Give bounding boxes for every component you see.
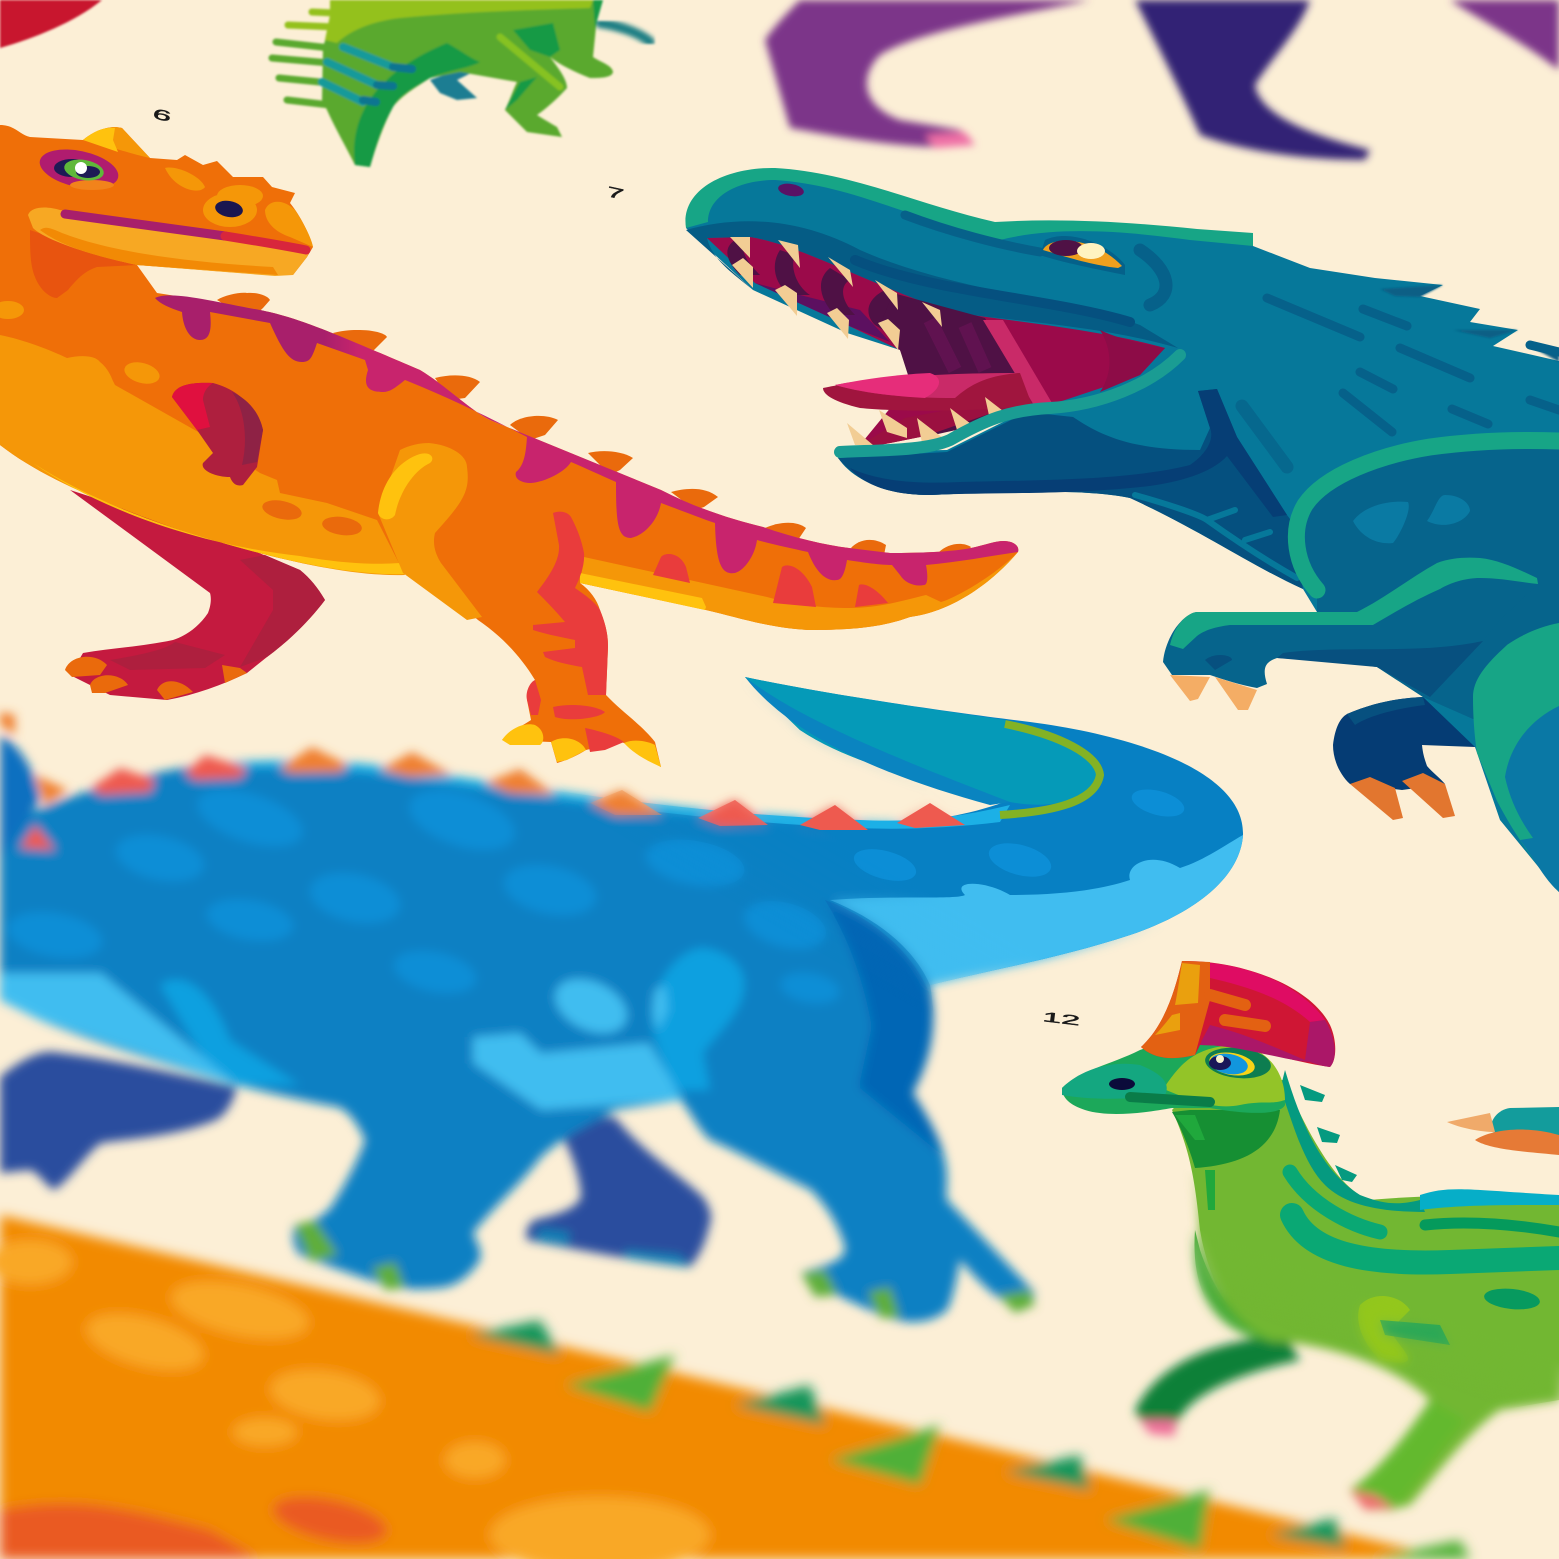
teal dinosaur number 7 xyxy=(685,168,1559,892)
thigh xyxy=(378,443,482,620)
thigh spots xyxy=(1353,495,1470,543)
eye xyxy=(36,143,122,195)
lower lip xyxy=(28,208,310,276)
far leg xyxy=(70,490,325,700)
jaw shadow xyxy=(30,230,137,298)
green dinosaur sharp upper overlay xyxy=(1062,961,1559,1406)
leg red stripe xyxy=(533,512,608,695)
spikes xyxy=(217,293,971,556)
tail red patches xyxy=(653,554,888,607)
teeth xyxy=(730,237,1007,445)
number label 6: 6 xyxy=(151,106,173,125)
top purple dinosaur legs xyxy=(765,0,1559,160)
orange spots xyxy=(0,1240,710,1559)
toes xyxy=(502,724,661,767)
upper jaw dark band xyxy=(686,221,1178,348)
back stripe and drips xyxy=(155,295,1018,586)
neck spine xyxy=(1280,1070,1425,1212)
snout xyxy=(165,167,205,191)
body xyxy=(0,125,1018,767)
back scutes xyxy=(1380,285,1559,362)
near leg xyxy=(1473,623,1559,892)
far back leg xyxy=(526,1117,711,1267)
blue dinosaur sharp upper overlay xyxy=(556,677,1244,1010)
far leg xyxy=(1333,697,1480,790)
far front leg xyxy=(0,1052,237,1190)
arm claws xyxy=(1170,675,1257,710)
neck marks xyxy=(1267,298,1559,432)
feet toes xyxy=(295,1220,1035,1318)
orange foreground dinosaur with green spikes xyxy=(0,1215,1470,1559)
back highlight xyxy=(200,760,1010,829)
spots xyxy=(4,778,1187,1008)
head fragment at left xyxy=(0,735,40,860)
foot claws xyxy=(1350,773,1455,820)
green back spikes xyxy=(470,1320,560,1355)
top green dinosaur xyxy=(272,0,650,167)
body spots xyxy=(122,359,162,387)
thigh xyxy=(1296,441,1559,720)
crest xyxy=(1141,961,1335,1067)
top-left red dinosaur fragment xyxy=(0,0,102,48)
lower jaw and throat xyxy=(838,389,1303,589)
eye xyxy=(1205,1048,1271,1078)
eye xyxy=(1040,236,1125,275)
head xyxy=(1062,1040,1285,1114)
tail stripe xyxy=(1000,724,1100,815)
stripes xyxy=(1290,1172,1380,1232)
orange dinosaur number 6 xyxy=(0,125,1018,767)
back spikes xyxy=(92,747,965,830)
lower red-orange band xyxy=(0,1504,260,1559)
lower jaw rim xyxy=(840,355,1180,452)
green top band xyxy=(685,168,1253,300)
tongue xyxy=(823,373,1032,411)
belly xyxy=(0,335,405,575)
hip shade xyxy=(825,900,943,1153)
number label 7: 7 xyxy=(605,184,625,203)
number label 12: 12 xyxy=(1042,1010,1081,1029)
shoulder light patch xyxy=(473,1033,683,1110)
belly yellow stripe xyxy=(33,463,408,574)
nostril xyxy=(777,182,805,198)
far foot toes xyxy=(65,657,247,700)
blue dinosaur number 9 blurred layer xyxy=(0,677,1243,1322)
shoulder xyxy=(652,948,744,1090)
mouth line xyxy=(65,214,225,236)
tail top xyxy=(745,677,1100,805)
crest xyxy=(83,127,150,158)
tail underside xyxy=(580,552,1018,630)
mouth xyxy=(707,237,1165,445)
far leg xyxy=(1135,1335,1300,1431)
shoulder mark xyxy=(172,383,263,485)
body xyxy=(1172,1080,1559,1508)
main body xyxy=(686,180,1559,892)
tail underside xyxy=(830,835,1243,985)
neighbouring dino tail tip xyxy=(1492,1107,1559,1135)
body xyxy=(0,677,1243,1322)
green bottom dinosaur number 12 blurred layer xyxy=(1128,1177,1559,1518)
arm xyxy=(1163,558,1538,697)
belly xyxy=(0,973,270,1085)
